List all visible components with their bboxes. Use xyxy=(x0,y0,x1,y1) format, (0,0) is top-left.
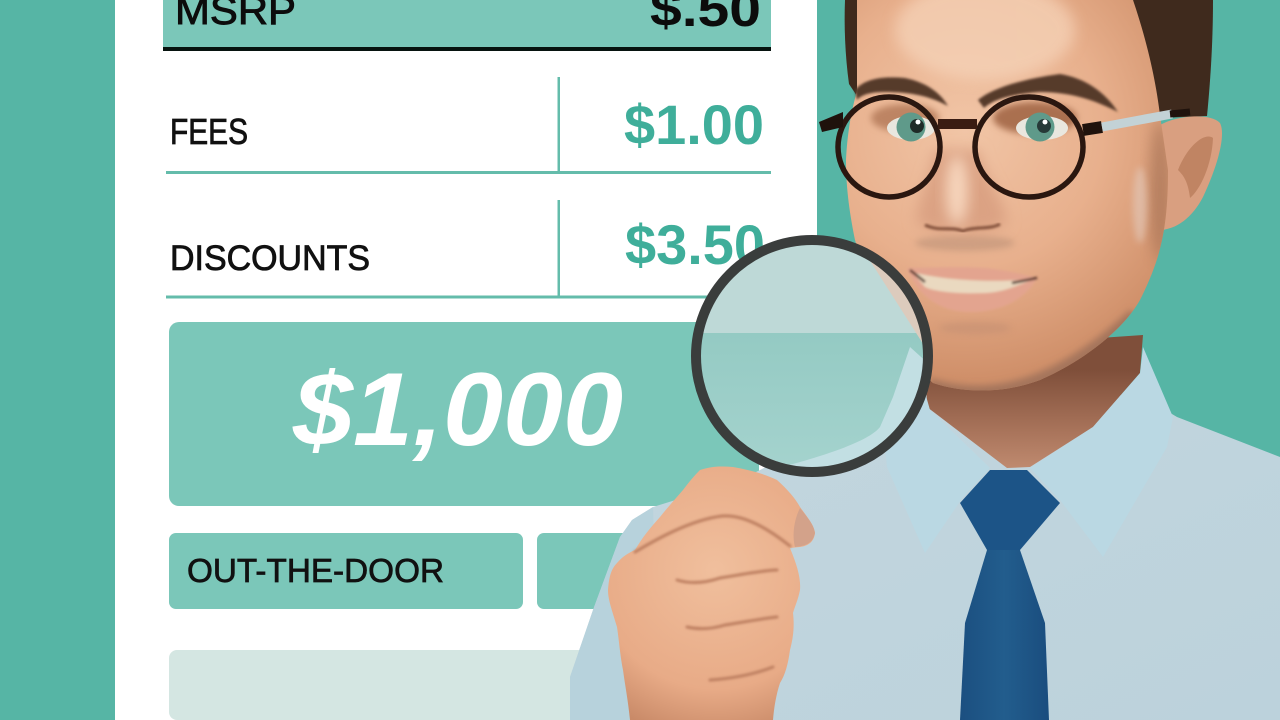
row: discounts: $3.50 xyxy=(625,213,765,276)
row: fees: $1.00 xyxy=(624,93,764,156)
nose xyxy=(917,150,1007,232)
eyebrows xyxy=(855,74,1118,112)
header row: MSRP xyxy=(163,0,771,51)
face xyxy=(846,0,1170,410)
row: fees xyxy=(166,77,771,174)
ring xyxy=(696,240,928,472)
hair xyxy=(845,0,1213,118)
lower grey box xyxy=(169,650,609,720)
thumbnail xyxy=(794,508,815,547)
collar right xyxy=(1030,347,1173,557)
secondary label box xyxy=(537,533,647,609)
total price box xyxy=(169,322,759,506)
ear xyxy=(1153,116,1222,230)
finger creases xyxy=(635,516,790,680)
collar left xyxy=(880,350,990,553)
row: discounts xyxy=(166,200,771,298)
total price box: $1,000 xyxy=(292,352,623,468)
out-the-door label xyxy=(169,533,523,609)
row: fees: FEES xyxy=(170,111,248,152)
handle xyxy=(724,512,748,530)
out-the-door label: OUT-THE-DOOR xyxy=(187,552,444,589)
magnifying glass xyxy=(695,240,940,473)
shirt xyxy=(570,395,1280,720)
person xyxy=(570,0,1280,720)
mouth xyxy=(907,267,1037,312)
panel: price sheet xyxy=(115,0,817,720)
neck xyxy=(925,335,1143,468)
glasses xyxy=(819,97,1190,197)
fist xyxy=(608,466,815,720)
sleeve xyxy=(570,507,660,720)
hand xyxy=(608,466,815,720)
eyes xyxy=(871,102,1077,142)
lens xyxy=(701,245,923,467)
row: discounts: DISCOUNTS xyxy=(170,239,370,278)
tie xyxy=(960,470,1060,720)
